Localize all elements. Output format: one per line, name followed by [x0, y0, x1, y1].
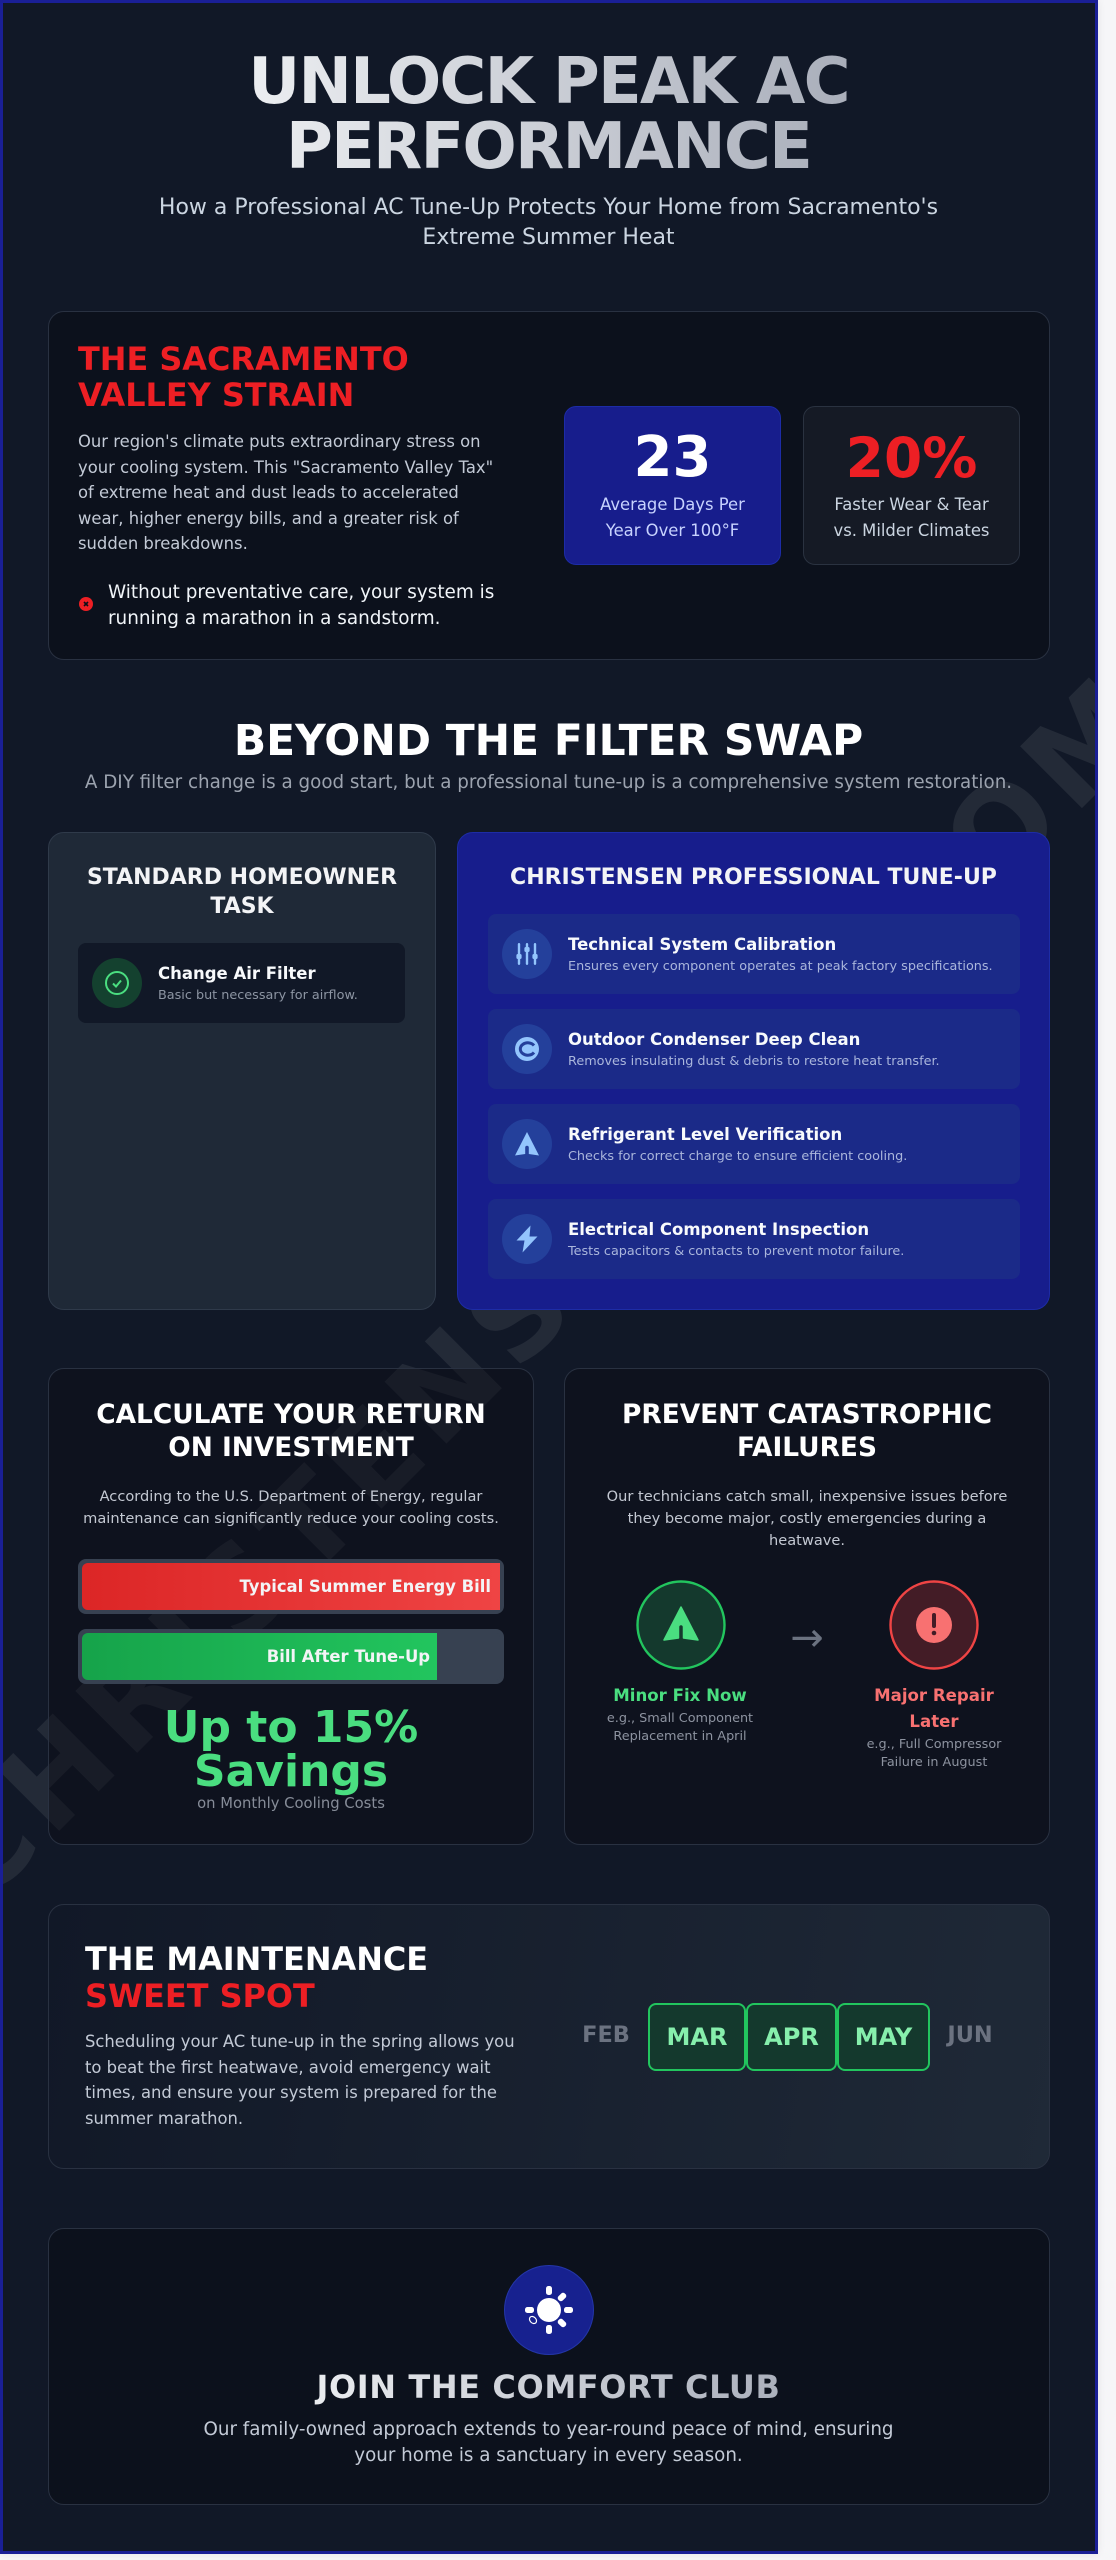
month: MAR	[648, 2003, 746, 2071]
item title: Refrigerant Level Verification	[568, 1125, 842, 1144]
text: technicians: Our technicians catch small, inexpensive issues before	[607, 1488, 1007, 1505]
text: family-owned	[203, 2419, 894, 2466]
heading: comfort club: JOIN THE COMFORT CLUB	[316, 2368, 781, 2406]
month: MAY: MAY	[855, 2023, 912, 2051]
panel: homeowner task	[48, 832, 436, 1310]
item description: Tests capacitors & contacts to prevent motor failure.	[568, 1244, 904, 1259]
stat label: Average Days Per	[600, 495, 745, 514]
icon: minor fix	[636, 1580, 726, 1670]
arrow: →	[790, 1615, 824, 1661]
icon: warning dot	[79, 597, 93, 611]
caption: minor fix: Replacement in April	[613, 1729, 747, 1744]
text: technicians: they become major, costly emergencies during a	[628, 1510, 986, 1527]
heading: homeowner: TASK	[210, 894, 274, 918]
stat label: Year Over 100°F	[606, 521, 739, 540]
item description: Removes insulating dust & debris to restore heat transfer.	[568, 1054, 940, 1069]
text: department of energy	[83, 1488, 499, 1527]
heading: prevent	[622, 1398, 992, 1462]
item: electrical	[488, 1199, 1020, 1279]
caption: minor fix: e.g., Small Component	[607, 1711, 753, 1726]
stat label: Faster Wear & Tear	[834, 495, 989, 514]
text: scheduling: to beat the first heatwave, avoid emergency wait	[85, 2058, 491, 2077]
panel: comfort club	[48, 2228, 1050, 2505]
callout: savings	[164, 1702, 418, 1797]
text: marathon note	[108, 582, 494, 629]
month: APR: APR	[764, 2023, 819, 2051]
heading: prevent: PREVENT CATASTROPHIC	[622, 1398, 992, 1430]
item: calibration	[488, 914, 1020, 994]
task description: Basic but necessary for airflow.	[158, 988, 358, 1003]
stat: days over 100F	[564, 406, 781, 565]
caption: savings: on Monthly Cooling Costs	[197, 1795, 385, 1812]
panel: professional tune-up	[457, 832, 1050, 1310]
item: condenser clean	[488, 1009, 1020, 1089]
text: scheduling	[85, 2032, 515, 2128]
bar fill: green: Bill After Tune-Up	[267, 1647, 430, 1666]
task: change air filter	[78, 943, 405, 1023]
text: scheduling: summer marathon.	[85, 2109, 243, 2128]
panel: Sacramento Valley strain	[48, 311, 1050, 660]
title: UNLOCK PEAK AC	[248, 44, 849, 118]
icon: bolt	[502, 1214, 552, 1264]
heading: ROI	[96, 1398, 486, 1462]
heading: prevent: FAILURES	[737, 1432, 877, 1462]
month: JUN: JUN	[947, 2022, 993, 2048]
month: MAY	[837, 2003, 930, 2071]
text: family-owned: your home is a sanctuary in every season.	[354, 2445, 743, 2466]
month: FEB: FEB	[582, 2022, 630, 2048]
heading: ROI: CALCULATE YOUR RETURN	[96, 1398, 486, 1430]
heading: valley strain: THE SACRAMENTO	[78, 340, 409, 378]
text: family-owned: Our family-owned approach extends to year-round peace of mind, ensuring	[203, 2419, 894, 2440]
item title: Electrical Component Inspection	[568, 1220, 869, 1239]
text: climate stress: your cooling system. This "Sacramento Valley Tax"	[78, 458, 493, 477]
heading: homeowner: STANDARD HOMEOWNER	[87, 864, 397, 890]
title: PERFORMANCE	[286, 110, 811, 184]
stat label	[600, 495, 745, 540]
bar fill: green	[82, 1633, 437, 1680]
bar fill: red	[82, 1563, 500, 1610]
icon: major repair	[889, 1580, 979, 1670]
item title: Outdoor Condenser Deep Clean	[568, 1030, 860, 1049]
icon: condenser	[502, 1024, 552, 1074]
icon: check	[92, 958, 142, 1008]
caption: major repair: e.g., Full Compressor	[867, 1736, 1001, 1752]
heading: professional: CHRISTENSEN PROFESSIONAL TUNE-UP	[510, 864, 997, 890]
callout: savings: Up to 15%	[164, 1702, 418, 1753]
heading: sweet spot	[85, 1940, 428, 2015]
subheading: A DIY filter change is a good start, but a professional tune-up is a comprehensive system restoration.	[85, 772, 1012, 793]
item title: Technical System Calibration	[568, 935, 836, 954]
stat number: 20%	[846, 426, 977, 490]
month: APR	[746, 2003, 837, 2071]
month: MAR: MAR	[667, 2023, 727, 2051]
label: major repair: Later	[909, 1712, 959, 1731]
title	[248, 50, 849, 181]
text: climate stress: sudden breakdowns.	[78, 534, 248, 553]
heading: valley strain	[78, 340, 409, 414]
panel: prevent failures	[564, 1368, 1050, 1845]
subtitle: How a Professional AC Tune-Up Protects Your Home from Sacramento's	[159, 195, 938, 220]
heading: beyond the filter swap: BEYOND THE FILTER SWAP	[234, 716, 863, 765]
heading: sweet spot: SWEET SPOT	[85, 1977, 315, 2015]
text: marathon note: Without preventative care, your system is	[108, 582, 494, 603]
text: marathon note: running a marathon in a sandstorm.	[108, 608, 441, 629]
stat: faster wear	[803, 406, 1020, 565]
item: refrigerant	[488, 1104, 1020, 1184]
heading: valley strain: VALLEY STRAIN	[78, 376, 354, 414]
panel: return on investment	[48, 1368, 534, 1845]
subtitle	[159, 195, 938, 250]
label: major repair	[874, 1686, 994, 1731]
caption: major repair: Failure in August	[881, 1754, 987, 1770]
task title: Change Air Filter	[158, 964, 316, 983]
bar fill: red: Typical Summer Energy Bill	[240, 1577, 491, 1596]
text: department of energy: maintenance can significantly reduce your cooling costs.	[83, 1510, 499, 1527]
icon: refrigerant	[502, 1119, 552, 1169]
stat label: vs. Milder Climates	[834, 521, 989, 540]
subtitle: Extreme Summer Heat	[422, 224, 675, 250]
caption: major repair	[867, 1736, 1002, 1770]
callout: savings: Savings	[194, 1746, 388, 1797]
label: minor fix: Minor Fix Now	[613, 1686, 747, 1705]
heading: homeowner	[87, 864, 397, 918]
label: major repair: Major Repair	[874, 1686, 994, 1705]
heading: sweet spot: THE MAINTENANCE	[85, 1940, 428, 1978]
text: technicians: heatwave.	[769, 1532, 845, 1549]
stat number: 23	[634, 425, 711, 490]
text: scheduling: Scheduling your AC tune-up in the spring allows you	[85, 2032, 515, 2051]
bar: after tune-up	[78, 1629, 504, 1684]
text: climate stress	[78, 432, 493, 553]
text: climate stress: of extreme heat and dust leads to accelerated	[78, 483, 459, 502]
text: climate stress: wear, higher energy bills, and a greater risk of	[78, 509, 459, 528]
icon: sun	[504, 2265, 594, 2355]
text: scheduling: times, and ensure your system is prepared for the	[85, 2083, 497, 2102]
text: department of energy: According to the U.S. Department of Energy, regular	[100, 1488, 482, 1505]
panel: sweet spot	[48, 1904, 1050, 2169]
caption: minor fix	[607, 1711, 753, 1744]
bar: typical bill	[78, 1559, 504, 1614]
icon: sliders	[502, 929, 552, 979]
text: climate stress: Our region's climate puts extraordinary stress on	[78, 432, 481, 451]
stat label	[834, 495, 989, 540]
text: technicians	[607, 1488, 1007, 1549]
heading: ROI: ON INVESTMENT	[168, 1432, 414, 1462]
item description: Checks for correct charge to ensure efficient cooling.	[568, 1149, 907, 1164]
item description: Ensures every component operates at peak factory specifications.	[568, 959, 993, 974]
